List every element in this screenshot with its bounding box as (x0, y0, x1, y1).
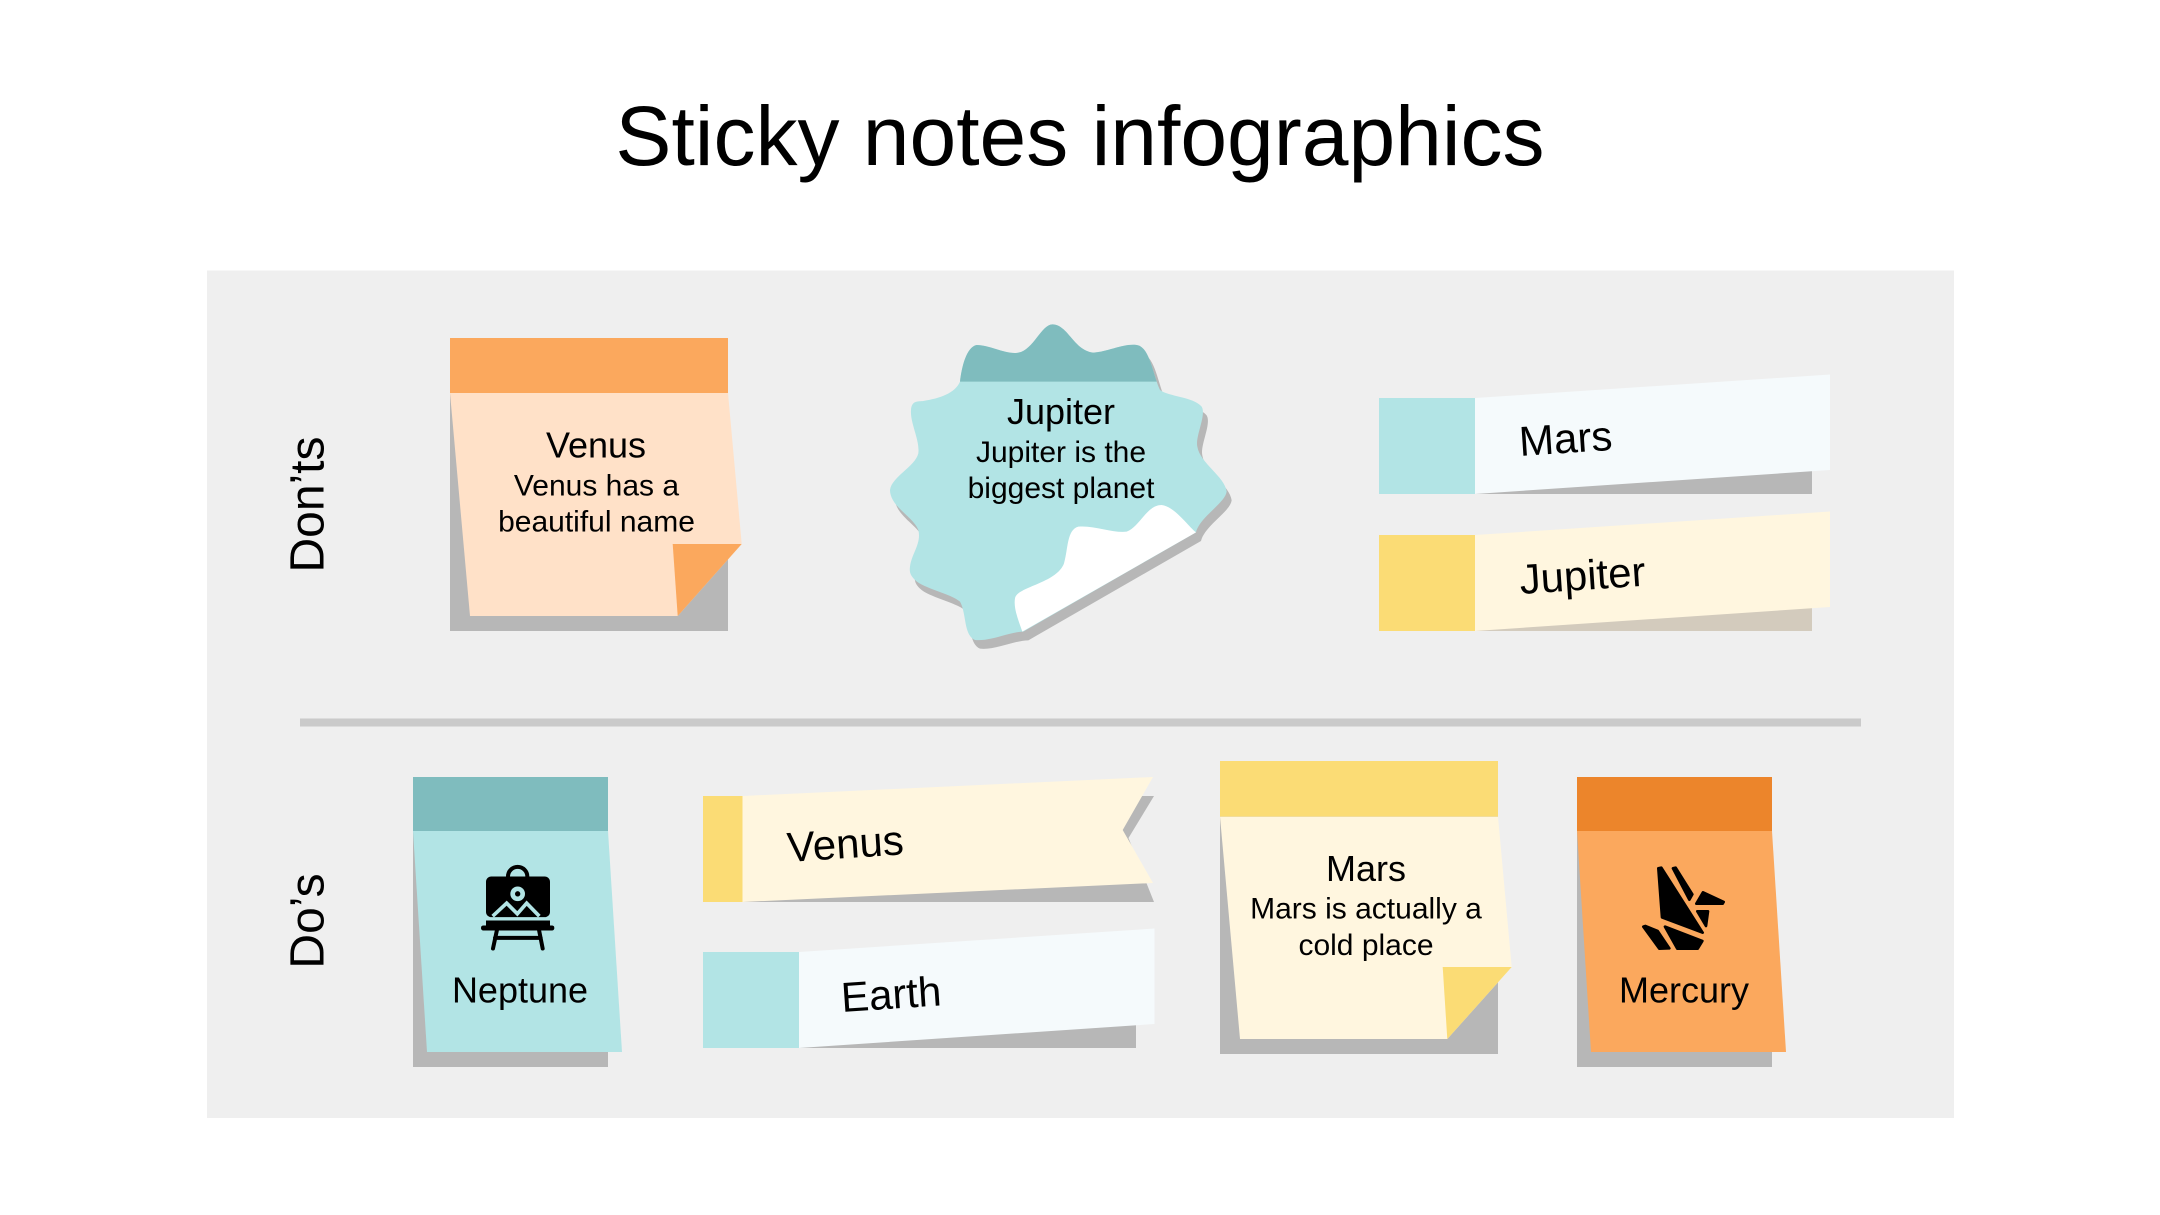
ribbon note: Jupiter: Jupiter (1518, 548, 1647, 603)
ribbon note: Venus: Venus (785, 816, 905, 871)
sticky note: Mars: Mars (1326, 848, 1406, 889)
sticky note: Jupiter star: Jupiter is the (976, 436, 1146, 469)
ribbon note: Jupiter (1379, 512, 1830, 631)
sticky note: Jupiter star (890, 324, 1232, 649)
ribbon note: Earth: Earth (839, 967, 943, 1021)
heading: Do's: Do’s (282, 873, 334, 969)
ribbon note: Mars: Mars (1517, 412, 1614, 465)
heading: Don'ts: Don’ts (282, 436, 334, 573)
sticky note: Mercury: Mercury (1619, 970, 1749, 1010)
panel: background (207, 270, 1954, 1118)
sticky note: Neptune: Neptune (452, 970, 588, 1010)
icon: origami bird (1643, 868, 1724, 949)
ribbon note: Mars (1379, 374, 1830, 494)
sticky note: Mars: Mars is actually a (1250, 892, 1482, 926)
sticky note: Mars (1220, 761, 1512, 1054)
ribbon note: Earth (703, 928, 1154, 1048)
sticky note: Venus: Venus (546, 424, 646, 466)
sticky note: Neptune (413, 777, 622, 1067)
sticky note: Venus: beautiful name (498, 506, 695, 538)
sticky note: Venus (450, 338, 742, 631)
sticky note: Jupiter star: Jupiter (1007, 391, 1115, 432)
sticky note: Venus: Venus has a (514, 470, 679, 502)
ribbon note: Venus (703, 777, 1154, 902)
sticky note: Jupiter star: biggest planet (968, 472, 1155, 505)
sticky note: Mercury (1577, 777, 1786, 1067)
sticky note: Mars: cold place (1298, 929, 1434, 962)
icon: easel (481, 867, 554, 948)
title: Sticky notes infographics (615, 89, 1545, 183)
